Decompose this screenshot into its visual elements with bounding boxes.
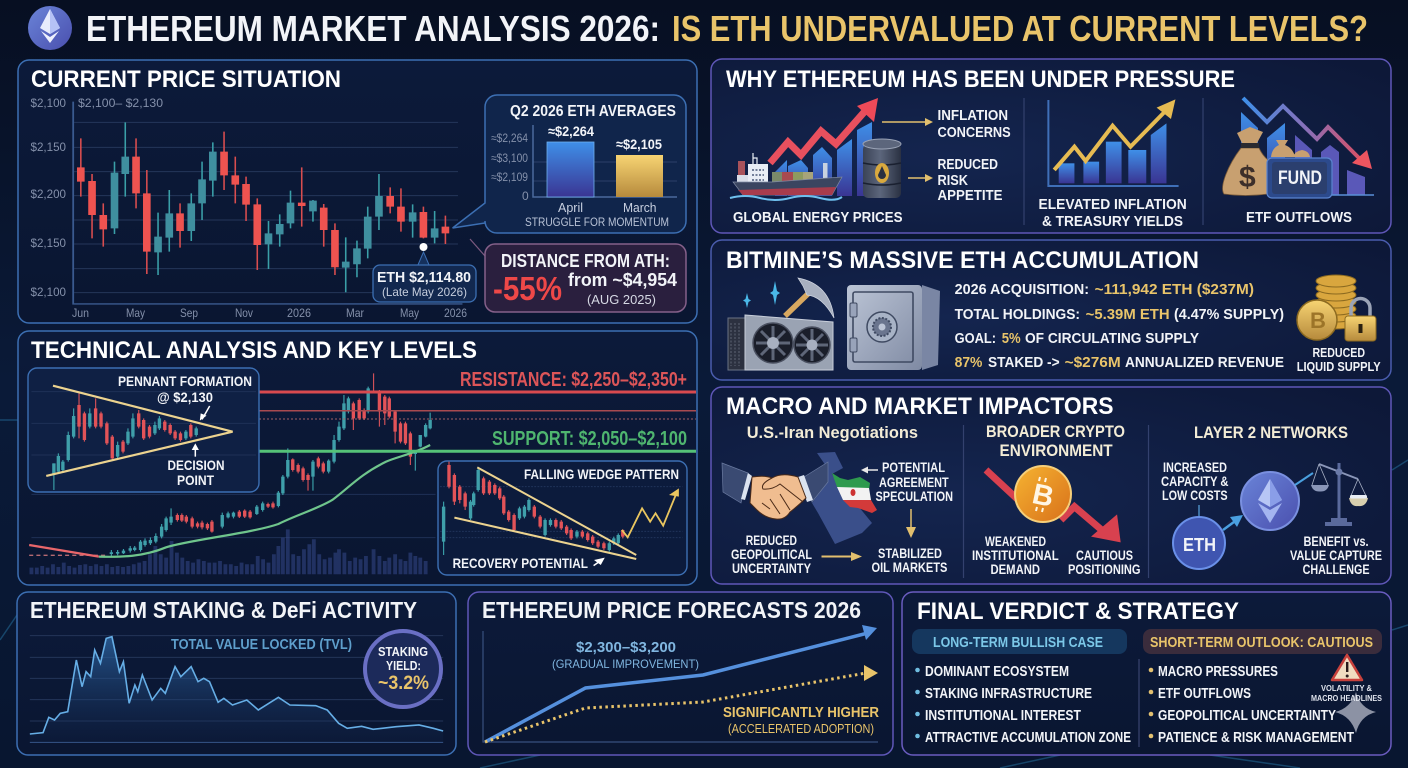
list: cautious: ETF OUTFLOWS — [1158, 686, 1251, 702]
subheading: layer 2: LAYER 2 NETWORKS — [1194, 424, 1348, 442]
list: bullish: INSTITUTIONAL INTEREST — [925, 708, 1081, 724]
callout: q2 averages: April — [558, 200, 583, 215]
icon: coins and lock — [1297, 275, 1376, 341]
chart icon: inflation and yields — [1048, 99, 1179, 186]
volume bars — [31, 529, 426, 574]
panel: why ethereum under pressure — [711, 59, 1391, 233]
heading: verdict: FINAL VERDICT & STRATEGY — [917, 598, 1239, 625]
callout: q2 averages: ≈$2,264 — [491, 131, 528, 145]
text block: bitmine stats: OF CIRCULATING SUPPLY — [1025, 331, 1199, 347]
text block: bitmine stats — [955, 282, 1284, 371]
callout: eth price: ETH $2,114.80 — [377, 269, 471, 286]
label: benefit vs value capture — [1290, 534, 1382, 577]
label: stabilized oil markets: STABILIZED — [878, 546, 942, 561]
icon: balance scale — [1311, 463, 1368, 526]
callout: distance from ath: (AUG 2025) — [587, 292, 656, 307]
label: increased capacity — [1161, 460, 1229, 503]
icon: energy prices with ship and barrel — [730, 98, 933, 200]
label: gradual improvement — [552, 639, 699, 671]
label: elevated inflation: & TREASURY YIELDS — [1042, 213, 1183, 230]
label: reduced geopolitical uncertainty: GEOPOLITICAL — [731, 547, 812, 562]
label: benefit vs value capture: BENEFIT vs. — [1304, 534, 1369, 549]
text block: bitmine stats: (4.47% SUPPLY) — [1174, 307, 1284, 323]
text block: bitmine stats: 5% — [1002, 331, 1021, 347]
text block: bitmine stats: TOTAL HOLDINGS: — [955, 307, 1080, 323]
label: weakened institutional demand: INSTITUTIONAL — [972, 548, 1059, 563]
label: increased capacity: LOW COSTS — [1162, 488, 1228, 503]
label: accelerated adoption: SIGNIFICANTLY HIGHER — [723, 704, 879, 721]
label: stabilized oil markets — [872, 546, 947, 575]
label: increased capacity: CAPACITY & — [1161, 474, 1229, 489]
label: potential agreement: POTENTIAL — [882, 460, 945, 475]
heading: forecasts: ETHEREUM PRICE FORECASTS 2026 — [482, 597, 861, 623]
inset: falling wedge: RECOVERY POTENTIAL — [453, 555, 588, 571]
label: volatility — [1311, 683, 1382, 703]
candlestick chart: $2,150 — [30, 236, 66, 250]
candlestick chart: Mar — [346, 306, 364, 320]
label: increased capacity: INCREASED — [1163, 460, 1227, 475]
label: potential agreement — [876, 460, 953, 504]
candlestick chart: $2,100 — [30, 96, 66, 110]
list: cautious: PATIENCE & RISK MANAGEMENT — [1158, 730, 1354, 746]
candlestick chart: 2026 — [444, 306, 467, 320]
label: benefit vs value capture: VALUE CAPTURE — [1290, 548, 1382, 563]
label: reduced geopolitical uncertainty: UNCERTAINTY — [732, 561, 811, 576]
label: weakened institutional demand: WEAKENED — [985, 534, 1046, 549]
callout: q2 averages: 0 — [522, 189, 529, 203]
badge: staking yield — [365, 631, 441, 707]
label: reduced risk appetite: APPETITE — [938, 188, 1003, 204]
label: cautious positioning: CAUTIOUS — [1076, 548, 1133, 563]
candlestick chart: Jun — [72, 306, 89, 320]
inset: falling wedge — [438, 461, 687, 575]
pill: long-term — [912, 629, 1127, 654]
icon: etf outflows: $ — [1239, 161, 1256, 194]
text block: bitmine stats: ~$276M — [1065, 355, 1121, 371]
label: reduced liquid supply: REDUCED — [1312, 346, 1365, 360]
label: reduced risk appetite: REDUCED — [938, 157, 998, 173]
text block: bitmine stats: GOAL: — [955, 331, 996, 347]
label: potential agreement: AGREEMENT — [879, 475, 949, 490]
callout: distance from ath — [470, 239, 686, 312]
inset: pennant formation — [28, 368, 259, 492]
label: weakened institutional demand: DEMAND — [990, 562, 1040, 577]
bar: march — [616, 155, 663, 197]
label: reduced geopolitical uncertainty: REDUCED — [746, 533, 797, 548]
callout: eth price: (Late May 2026) — [382, 285, 467, 299]
label: benefit vs value capture: CHALLENGE — [1303, 562, 1370, 577]
list: cautious — [1149, 664, 1354, 746]
list: bullish — [915, 664, 1131, 746]
subheading: broader crypto — [986, 423, 1125, 460]
candlestick chart: May — [400, 306, 419, 320]
label: etf outflows: ETF OUTFLOWS — [1246, 209, 1352, 226]
label: cautious positioning — [1068, 548, 1140, 577]
subheading: broader crypto: BROADER CRYPTO — [986, 423, 1125, 441]
candlestick chart: Nov — [235, 306, 253, 320]
pill: long-term: LONG-TERM BULLISH CASE — [933, 634, 1103, 651]
label: gradual improvement: $2,300–$3,200 — [576, 639, 676, 656]
label: stabilized oil markets: OIL MARKETS — [872, 560, 947, 575]
label: weakened institutional demand — [972, 534, 1059, 577]
callout: q2 averages: ≈$2,264 — [548, 123, 594, 139]
label: elevated inflation: ELEVATED INFLATION — [1038, 196, 1187, 213]
icon: handshake and map — [722, 452, 916, 561]
text block: bitmine stats: ANNUALIZED REVENUE — [1125, 355, 1284, 371]
pill: short-term — [1143, 629, 1382, 654]
icon: safe — [847, 285, 940, 370]
label: inflation concerns: INFLATION — [938, 108, 1008, 124]
panel: staking and defi — [17, 592, 456, 755]
panel: macro and market impactors — [711, 387, 1391, 584]
label: reduced risk appetite: RISK — [938, 173, 968, 189]
icon: eth token with arrow to ethereum: ETH — [1183, 535, 1216, 555]
label: accelerated adoption — [723, 704, 879, 736]
text block: bitmine stats: 2026 ACQUISITION: — [955, 282, 1089, 298]
candlestick chart: $2,150 — [30, 140, 66, 154]
label: tvl: TOTAL VALUE LOCKED (TVL) — [171, 637, 352, 653]
title text white: ETHEREUM MARKET ANALYSIS 2026: — [86, 8, 660, 49]
list: cautious: GEOPOLITICAL UNCERTAINTY — [1158, 708, 1336, 724]
badge: staking yield: STAKING — [378, 645, 428, 659]
callout: distance from ath: -55% — [493, 270, 562, 307]
panel: current price situation — [18, 60, 697, 323]
label: volatility: VOLATILITY & — [1321, 683, 1372, 693]
label: reduced liquid supply — [1297, 346, 1381, 374]
pill: short-term: SHORT-TERM OUTLOOK: CAUTIOUS — [1150, 634, 1373, 651]
callout: eth price — [373, 243, 476, 302]
label: inflation concerns: CONCERNS — [938, 125, 1011, 141]
badge: staking yield: YIELD: — [386, 659, 421, 673]
list: bullish: DOMINANT ECOSYSTEM — [925, 664, 1069, 680]
moving average — [99, 445, 430, 557]
candlestick chart: $2,100 — [30, 285, 66, 299]
resistance label: RESISTANCE: $2,250–$2,350+ — [460, 369, 687, 391]
text block: bitmine stats: ~111,942 ETH ($237M) — [1095, 282, 1254, 298]
label: gradual improvement: (GRADUAL IMPROVEMENT) — [552, 657, 699, 671]
inset: pennant formation: PENNANT FORMATION — [118, 373, 252, 389]
text block: bitmine stats: ~5.39M ETH — [1086, 307, 1170, 323]
callout: q2 averages: Q2 2026 ETH AVERAGES — [510, 103, 676, 120]
icon: bitcoin with falling arrow — [986, 466, 1121, 542]
heading: macro: MACRO AND MARKET IMPACTORS — [726, 393, 1114, 420]
heading: under pressure: WHY ETHEREUM HAS BEEN UNDER PRESSURE — [726, 66, 1235, 93]
callout: distance from ath: from ~$4,954 — [568, 269, 678, 290]
label: reduced risk appetite — [938, 157, 1003, 204]
heading: technical analysis: TECHNICAL ANALYSIS AND KEY LEVELS — [31, 337, 477, 364]
icon: bitcoin with falling arrow: B — [1029, 478, 1057, 514]
label: reduced geopolitical uncertainty — [731, 533, 812, 576]
label: reduced liquid supply: LIQUID SUPPLY — [1297, 360, 1381, 374]
callout: q2 averages: ≈$2,105 — [616, 136, 662, 152]
inset: pennant formation: @ $2,130 — [157, 389, 213, 405]
support label: SUPPORT: $2,050–$2,100 — [492, 428, 687, 450]
support level line — [259, 450, 696, 453]
callout: q2 averages: ≈$2,109 — [491, 170, 528, 184]
resistance level lines — [259, 392, 696, 419]
candlestick chart: $2,100– $2,130 — [78, 96, 163, 110]
bar: april — [547, 142, 594, 197]
label: cautious positioning: POSITIONING — [1068, 562, 1140, 577]
icon: etf outflows — [1223, 98, 1374, 198]
icon: gpu and pickaxe — [728, 278, 834, 370]
label: volatility: MACRO HEADLINES — [1311, 693, 1382, 703]
callout: distance from ath: DISTANCE FROM ATH: — [501, 251, 670, 271]
icon: warning — [1332, 655, 1362, 680]
line: accelerated forecast — [485, 665, 878, 742]
inset: pennant formation: POINT — [177, 472, 214, 488]
candlestick chart — [30, 96, 467, 320]
panel: final verdict — [902, 592, 1391, 755]
callout: q2 averages: ≈$3,100 — [491, 151, 528, 165]
badge: staking yield: ~3.2% — [378, 673, 429, 694]
heading: staking: ETHEREUM STAKING & DeFi ACTIVITY — [30, 597, 417, 623]
label: inflation concerns — [938, 108, 1011, 141]
panel: bitmine accumulation — [711, 240, 1391, 380]
list: bullish: STAKING INFRASTRUCTURE — [925, 686, 1092, 702]
label: accelerated adoption: (ACCELERATED ADOPTION) — [728, 722, 874, 736]
icon: coins and lock: B — [1310, 308, 1326, 333]
title — [28, 6, 1368, 50]
list: cautious: MACRO PRESSURES — [1158, 664, 1278, 680]
area chart: tvl — [30, 636, 443, 742]
text block: bitmine stats: 87% — [955, 355, 982, 371]
candlestick chart: $2,200 — [30, 187, 66, 201]
candlestick chart: Sep — [180, 306, 198, 320]
line: gradual forecast — [485, 625, 877, 742]
heading: current price: CURRENT PRICE SITUATION — [31, 66, 341, 93]
candlestick chart: 2026 — [287, 306, 311, 320]
inset: pennant formation: DECISION — [168, 457, 224, 473]
list: bullish: ATTRACTIVE ACCUMULATION ZONE — [925, 730, 1131, 746]
panel: price forecasts — [468, 592, 893, 755]
inset: falling wedge: FALLING WEDGE PATTERN — [524, 466, 679, 482]
icon: sparkle — [1335, 692, 1376, 733]
callout: q2 averages: March — [623, 200, 656, 215]
text block: bitmine stats: STAKED -> — [988, 355, 1060, 371]
icon: etf outflows: FUND — [1278, 168, 1322, 189]
subheading: broader crypto: ENVIRONMENT — [1000, 442, 1113, 460]
heading: bitmine: BITMINE’S MASSIVE ETH ACCUMULATION — [726, 247, 1199, 274]
icon: eth token with arrow to ethereum — [1173, 472, 1313, 569]
main candlestick chart — [29, 373, 436, 574]
callout: q2 averages: STRUGGLE FOR MOMENTUM — [525, 215, 669, 229]
candlestick chart: May — [126, 306, 145, 320]
label: potential agreement: SPECULATION — [876, 489, 953, 504]
label: global energy prices: GLOBAL ENERGY PRICES — [733, 209, 902, 226]
subheading: us-iran: U.S.-Iran Negotiations — [747, 423, 918, 442]
label: elevated inflation — [1038, 196, 1187, 230]
icon: ethereum logo — [28, 6, 72, 50]
callout: q2 averages — [453, 95, 686, 233]
panel: technical analysis — [18, 331, 697, 585]
